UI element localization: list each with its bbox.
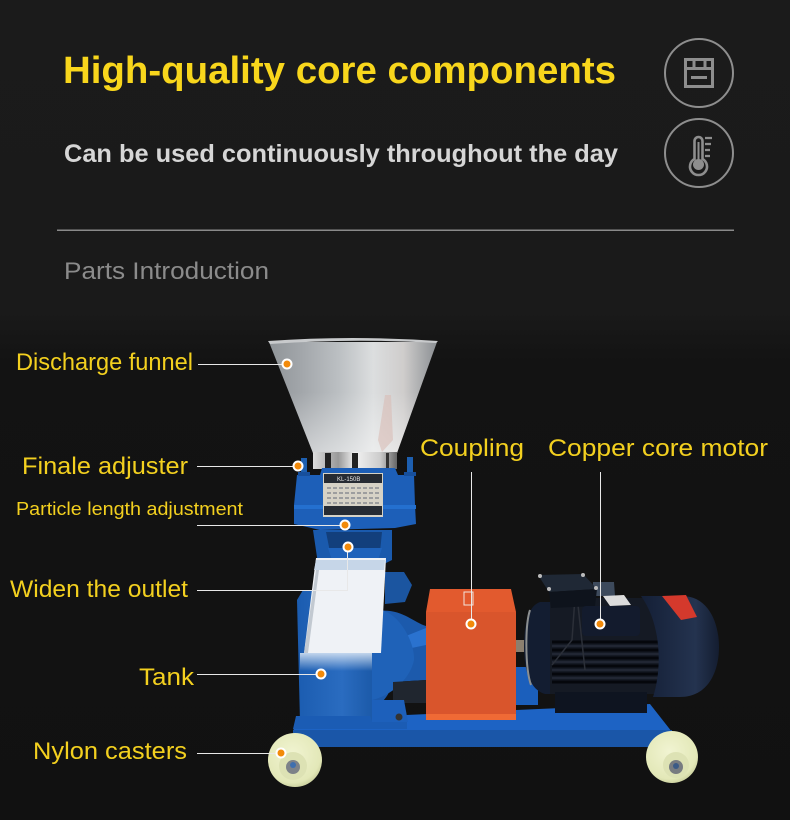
label: Copper core motor <box>548 435 768 628</box>
label: Discharge funnel: Discharge funnel <box>16 349 193 376</box>
nameplate: KL-150B <box>337 477 360 483</box>
label: Coupling <box>420 435 524 628</box>
label: Tank: Tank <box>139 664 195 691</box>
mill head <box>294 457 416 530</box>
title: High-quality core components <box>63 50 616 92</box>
base plate <box>293 667 672 747</box>
red label <box>662 595 697 620</box>
tank body <box>293 572 426 729</box>
label: Discharge funnel <box>16 349 292 376</box>
nameplate <box>323 473 383 517</box>
motor front rim highlight <box>526 610 531 685</box>
label: Coupling: Coupling <box>420 435 524 462</box>
motor body with fins <box>550 597 662 694</box>
white outlet chute <box>304 558 386 653</box>
label: Nylon casters <box>33 738 286 765</box>
label: Particle length adjustment: Particle length adjustment <box>16 499 243 519</box>
icon: thermometer <box>665 119 733 187</box>
chrome collar <box>313 452 397 469</box>
label: Copper core motor: Copper core motor <box>548 435 768 462</box>
motor shaft <box>516 640 530 652</box>
capacitor <box>582 606 640 636</box>
label: Widen the outlet <box>10 542 352 603</box>
label: Finale adjuster: Finale adjuster <box>22 453 188 480</box>
caster left <box>268 733 322 787</box>
outlet neck <box>313 530 392 564</box>
motor <box>516 573 719 713</box>
subtitle: Can be used continuously throughout the day <box>64 140 618 168</box>
section heading: Parts Introduction <box>64 258 269 285</box>
motor front end <box>524 602 556 694</box>
label: Finale adjuster <box>22 453 302 480</box>
motor nameplate <box>603 595 631 606</box>
label: Nylon casters: Nylon casters <box>33 738 187 765</box>
label: Tank <box>139 664 326 691</box>
icon: oven component <box>665 39 733 107</box>
label: Particle length adjustment <box>16 499 350 530</box>
motor foot <box>555 692 647 713</box>
fan cover <box>641 596 719 697</box>
divider <box>57 230 734 231</box>
funnel <box>268 338 438 453</box>
junction box <box>538 573 615 608</box>
label: Widen the outlet: Widen the outlet <box>10 576 188 603</box>
caster right <box>646 731 698 783</box>
coupling guard <box>426 589 516 720</box>
machine photo illustration <box>268 338 719 787</box>
